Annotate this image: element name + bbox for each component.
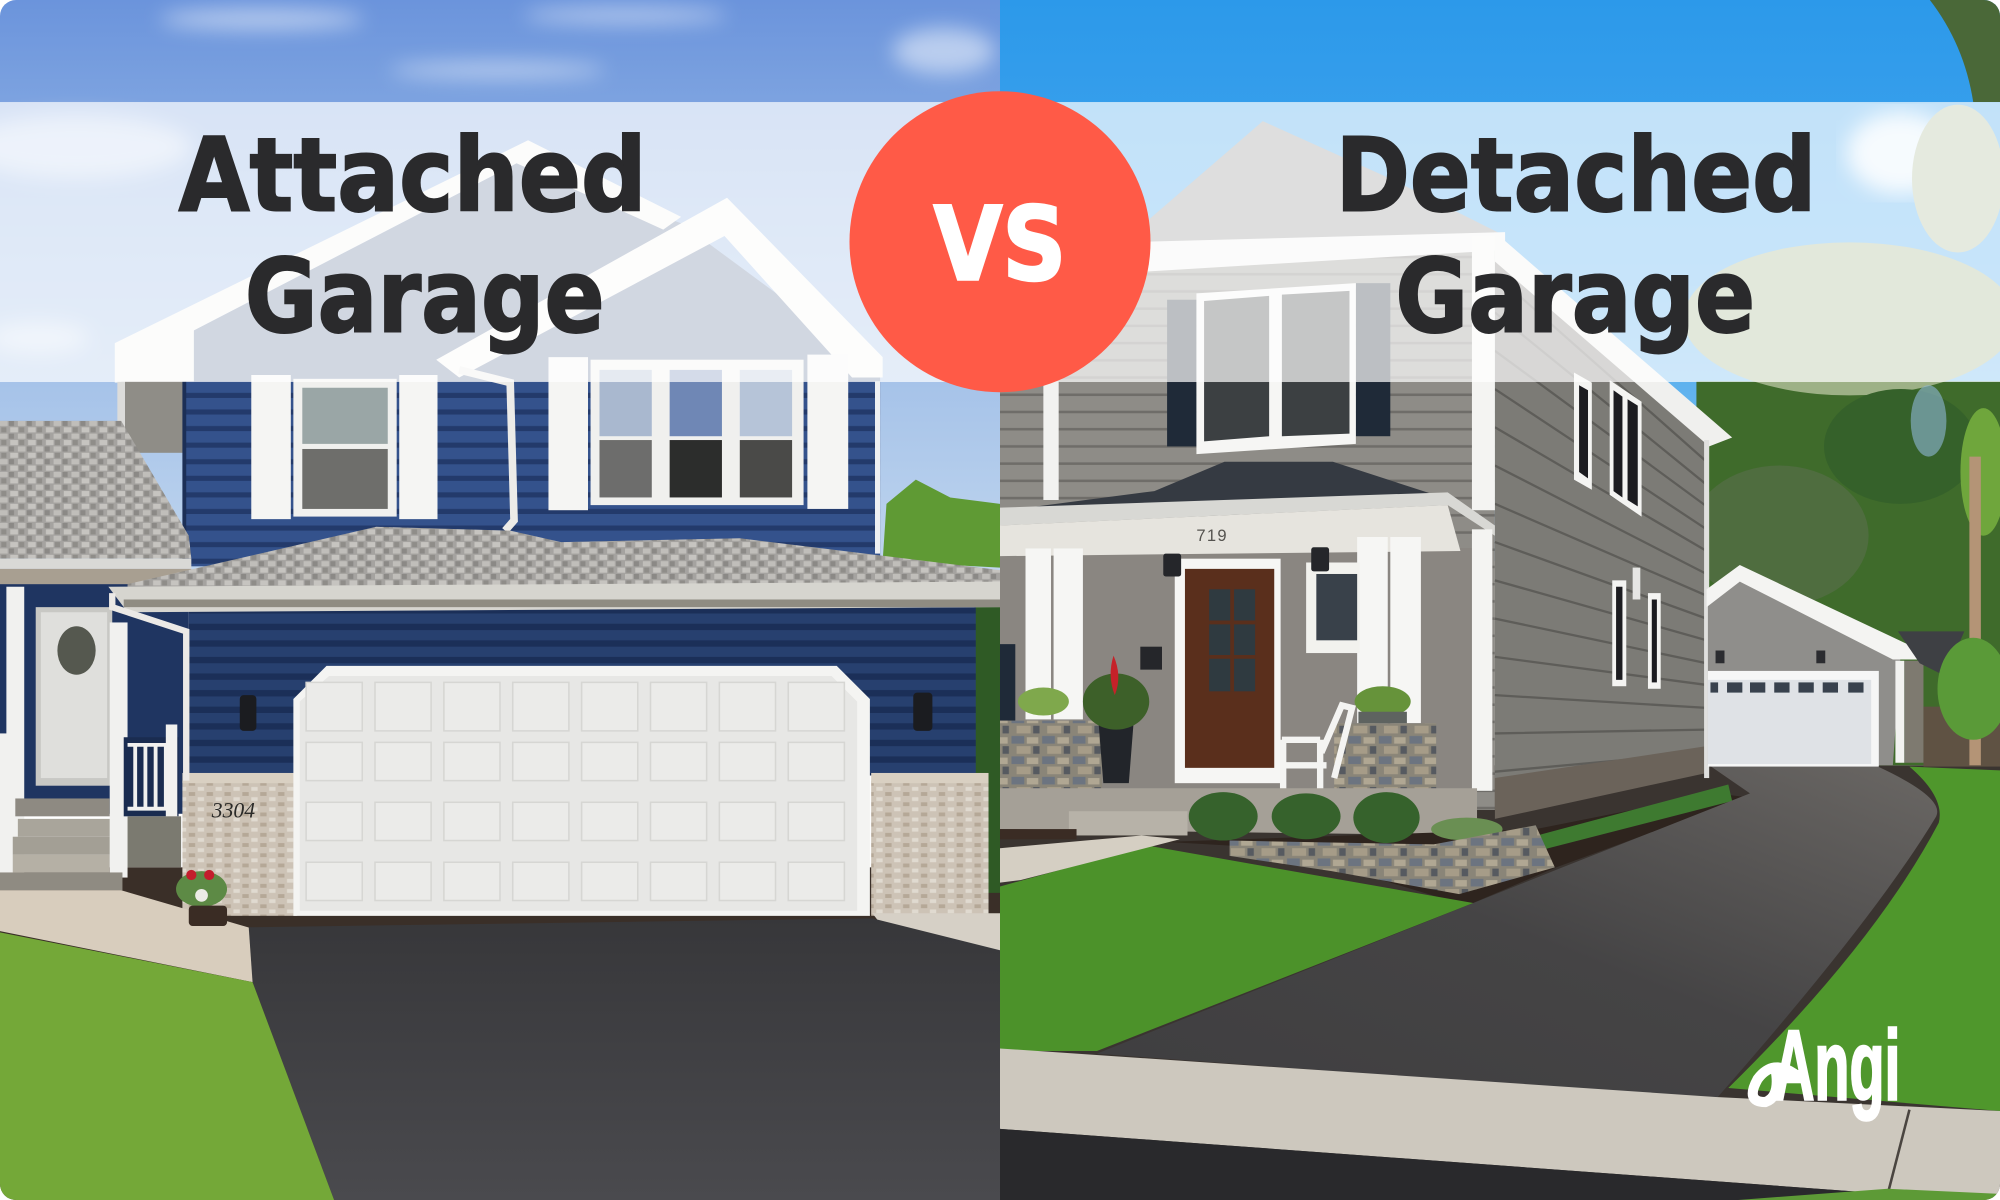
- upper navy wall: [182, 381, 880, 566]
- main house roof: [1122, 121, 1505, 242]
- left lawn: [0, 932, 334, 1200]
- window group 1: [251, 375, 438, 519]
- title: attached garage: Garage: [245, 238, 605, 357]
- detached garage: [1707, 565, 1923, 767]
- concrete sidewalk: [1000, 1048, 2000, 1196]
- angi logo: Angi: [1773, 1010, 1901, 1121]
- left wing roof: [0, 421, 191, 587]
- sidewalk path: [0, 890, 253, 982]
- retaining wall: [1230, 825, 1555, 894]
- stone piers: [1000, 721, 1436, 800]
- porch slab and step: [1000, 788, 1477, 839]
- porch: [1000, 462, 1495, 791]
- tree behind garage: [883, 480, 1000, 893]
- mulch bed: [1166, 793, 1747, 906]
- wall lamps: [240, 693, 932, 731]
- neighbor roof, fence, pole and tree: [1898, 457, 2000, 767]
- porch number: 719: [1196, 526, 1228, 545]
- ground base: [0, 867, 1000, 1200]
- right lawn: [1728, 767, 2000, 1111]
- title: detached garage: Garage: [1395, 238, 1755, 357]
- street: [1000, 1129, 1888, 1200]
- front wall: [1000, 232, 1505, 810]
- photo: attached garage house: [0, 0, 1000, 1200]
- left sky with clouds: [0, 0, 1000, 599]
- title: detached garage: [1335, 116, 1816, 357]
- mulch and flowers: [176, 870, 227, 926]
- front upper window: [1167, 283, 1390, 454]
- title: attached garage: [179, 116, 647, 357]
- title: attached garage: Attached: [179, 116, 647, 235]
- garage door: [293, 666, 870, 916]
- front lawn: [1000, 846, 1473, 1051]
- right driveway: [1097, 765, 1937, 1099]
- side wall: [1472, 232, 1732, 819]
- porch lanterns and mailbox: [1140, 547, 1329, 670]
- vs badge: VS: [934, 185, 1066, 304]
- garage navy wall: [189, 607, 976, 776]
- left driveway: [249, 918, 1000, 1200]
- front door: [1175, 559, 1281, 783]
- house number: 3304: [211, 799, 255, 823]
- garage roof: [108, 527, 1000, 781]
- grass strip: [1735, 1189, 2000, 1200]
- window group 2: [548, 355, 848, 510]
- upper gables: [115, 140, 883, 561]
- brick piers: [182, 773, 989, 916]
- porch side window: [1306, 562, 1360, 653]
- downspout: [459, 370, 514, 531]
- right sky: [1000, 0, 2000, 561]
- walkway: [1000, 835, 1180, 883]
- shrubs: [1189, 784, 1732, 849]
- photo: detached garage house: [1000, 0, 2000, 1200]
- side windows: [1574, 372, 1661, 689]
- vs badge: [849, 91, 1151, 392]
- translucent title band: [0, 102, 2000, 382]
- title: detached garage: Detached: [1335, 116, 1816, 235]
- background trees: [1684, 0, 2000, 765]
- porch with door: [0, 584, 189, 890]
- left wing soffit: [117, 381, 185, 453]
- angi logo: [1753, 1010, 1901, 1121]
- ground base: [1000, 765, 2000, 1200]
- gravel: [872, 913, 1000, 954]
- white porch chair: [1282, 705, 1352, 791]
- planters: [1018, 656, 1411, 783]
